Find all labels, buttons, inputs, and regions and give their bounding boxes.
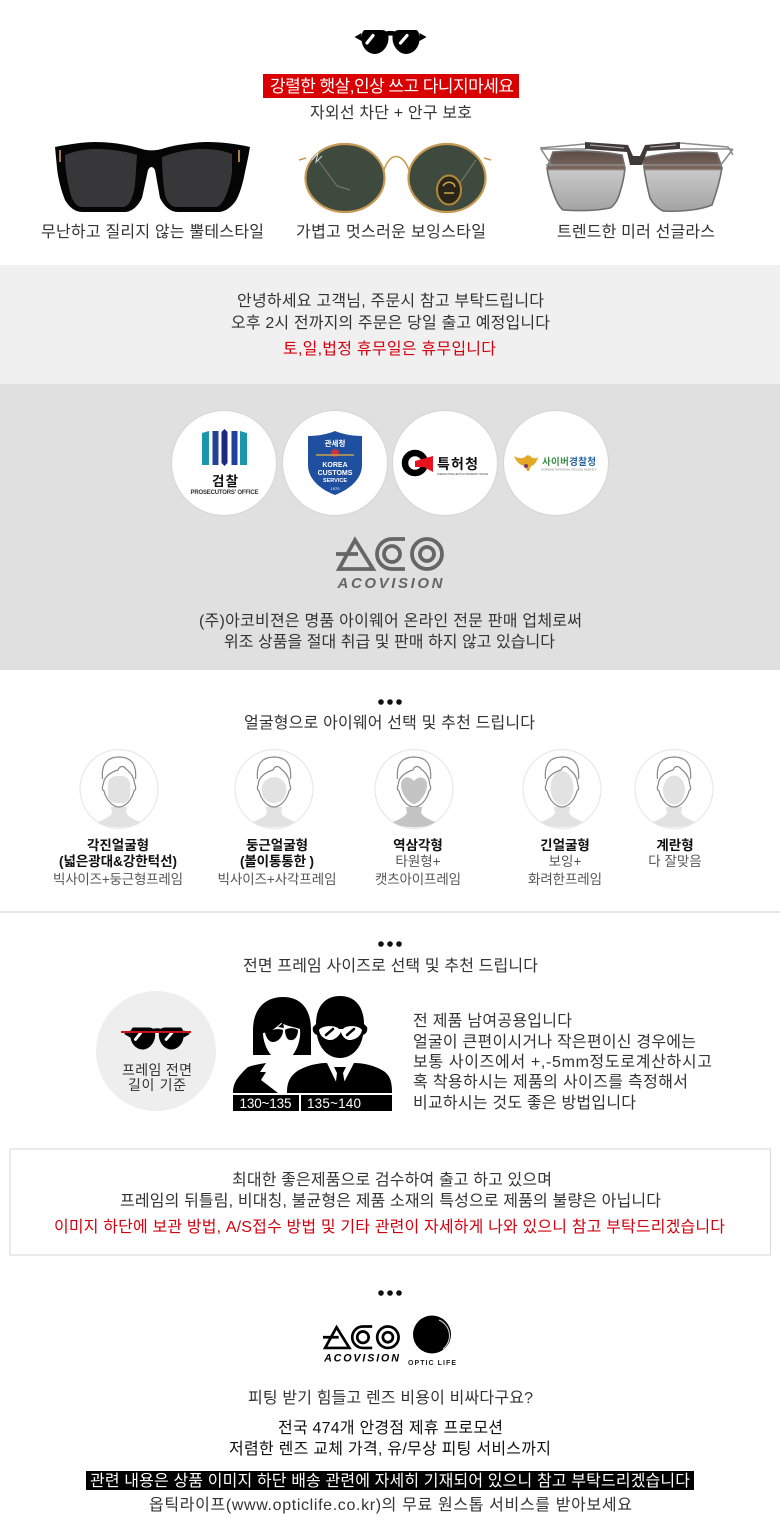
- frame width measure badge: [96, 991, 216, 1111]
- face: round: (볼이통통한 ): [240, 854, 314, 869]
- face: long: [523, 750, 602, 887]
- heading: 전면 프레임 사이즈로 선택 및 추천 드립니다: [243, 957, 538, 975]
- dots: [378, 1290, 402, 1296]
- panel: shipping notice: [0, 265, 780, 384]
- red headline: 강렬한 햇살,인상 쓰고 다니지마세요: [270, 77, 514, 96]
- face: inverted triangle: 캣츠아이프레임: [375, 872, 461, 887]
- notice text: 안녕하세요 고객님, 주문시 참고 부탁드립니다: [237, 292, 544, 310]
- face: oval: 계란형: [656, 838, 694, 853]
- shipping cutoff text: 오후 2시 전까지의 주문은 당일 출고 예정입니다: [231, 314, 550, 332]
- face: round: 둥근얼굴형: [246, 838, 308, 853]
- icon: sunglasses: [354, 30, 426, 54]
- face: long: 긴얼굴형: [540, 838, 590, 853]
- black notice bar: 관련 내용은 상품 이미지 하단 배송 관련에 자세히 기재되어 있으니 참고 부탁드리겠습니다: [90, 1472, 690, 1490]
- promotion line: 전국 474개 안경점 제휴 프로모션: [278, 1419, 503, 1437]
- lens price line: 저렴한 렌즈 교체 가격, 유/무상 피팅 서비스까지: [229, 1440, 551, 1458]
- face: square: [53, 750, 183, 887]
- dots: [378, 699, 402, 705]
- face: round: 빅사이즈+사각프레임: [218, 872, 336, 887]
- badge: patent office: 특 허 청: [437, 456, 478, 472]
- badge: cyber police: KOREAN NATIONAL POLICE AGENCY: [541, 468, 597, 472]
- face: oval: 다 잘맞음: [648, 854, 702, 869]
- quality inspection line: 최대한 좋은제품으로 검수하여 출고 하고 있으며: [232, 1171, 552, 1189]
- badge: cyber police: 사이버경찰청: [542, 456, 596, 468]
- face: square: 각진얼굴형: [87, 838, 149, 853]
- subheading: 자외선 차단 + 안구 보호: [310, 104, 472, 122]
- frame width measure badge: 길이 기준: [128, 1077, 186, 1093]
- product: black square sunglasses: [55, 142, 250, 212]
- holiday warning: 토,일,법정 휴무일은 휴무입니다: [283, 340, 496, 358]
- panel: intro: [41, 30, 733, 241]
- panel: face shape guide: [53, 699, 713, 887]
- logo: acovision black: [323, 1327, 399, 1364]
- face: square: 빅사이즈+둥근형프레임: [53, 872, 183, 887]
- panel: optic life service: [86, 1290, 694, 1514]
- badge: patent office: KOREAN INTELLECTUAL PROPERTY OFFICE: [437, 472, 488, 476]
- icon: woman and man silhouettes with size labels: [233, 996, 392, 1111]
- badge: prosecutors office: [172, 410, 276, 516]
- company statement: (주)아코비젼은 명품 아이웨어 온라인 전문 판매 업체로써: [199, 612, 582, 630]
- question line: 피팅 받기 힘들고 렌즈 비용이 비싸다구요?: [248, 1389, 533, 1407]
- face: inverted triangle: 역삼각형: [393, 838, 443, 853]
- frame width measure badge: 프레임 전면: [122, 1062, 192, 1078]
- badge: prosecutors office: PROSECUTORS' OFFICE: [190, 490, 258, 496]
- badge: cyber police: [504, 410, 608, 516]
- size advice text: 보통 사이즈에서 +,-5mm정도로계산하시고: [413, 1053, 712, 1071]
- badge: korea customs: [282, 410, 388, 516]
- logo: optic life: [408, 1316, 456, 1367]
- product: gold round sunglasses: [299, 144, 491, 212]
- badge: korea customs: 관세청: [325, 438, 345, 448]
- size advice text: 전 제품 남여공용입니다: [413, 1012, 572, 1030]
- size advice text: 비교하시는 것도 좋은 방법입니다: [413, 1094, 636, 1112]
- panel: frame size guide: [96, 941, 712, 1112]
- face: long: 화려한프레임: [528, 872, 602, 887]
- service line: 옵틱라이프(www.opticlife.co.kr)의 무료 원스톱 서비스를 받아보세요: [149, 1496, 632, 1514]
- size advice text: [413, 1012, 712, 1112]
- icon: woman and man silhouettes with size labels: 135~140: [307, 1096, 361, 1111]
- panel: quality note box: [10, 1149, 770, 1255]
- face: inverted triangle: 타원형+: [395, 854, 441, 869]
- caption: mirror style: 트렌드한 미러 선글라스: [557, 223, 715, 241]
- face: inverted triangle: [375, 750, 461, 887]
- icon: woman and man silhouettes with size labels: 130~135: [240, 1096, 292, 1111]
- face: round: [218, 750, 336, 887]
- red notice line: 이미지 하단에 보관 방법, A/S접수 방법 및 기타 관련이 자세하게 나와 있으니 참고 부탁드리겠습니다: [54, 1218, 725, 1236]
- logo: optic life: OPTIC LIFE: [408, 1360, 456, 1367]
- product characteristics line: 프레임의 뒤틀림, 비대칭, 불균형은 제품 소재의 특성으로 제품의 불량은 아닙니다: [120, 1192, 661, 1210]
- badge: korea customs: KOREA: [322, 462, 348, 469]
- badge: patent office: [392, 410, 498, 516]
- heading: 얼굴형으로 아이웨어 선택 및 추천 드립니다: [244, 714, 535, 732]
- badge: prosecutors office: 검찰: [212, 474, 239, 489]
- face: square: (넓은광대&강한턱선): [59, 854, 177, 869]
- panel: authenticity: [0, 384, 780, 670]
- badge: korea customs: CUSTOMS: [318, 470, 353, 477]
- caption: black frame style: 무난하고 질리지 않는 뿔테스타일: [41, 223, 264, 241]
- face: oval: [635, 750, 713, 869]
- badge: korea customs: 1970: [331, 486, 340, 491]
- dots: [378, 941, 402, 947]
- no counterfeit statement: 위조 상품을 절대 취급 및 판매 하지 않고 있습니다: [224, 633, 555, 651]
- caption: gold frame style: 가볍고 멋스러운 보잉스타일: [296, 223, 486, 241]
- logo: acovision: [336, 539, 444, 592]
- badge: korea customs: SERVICE: [323, 478, 347, 484]
- size advice text: 얼굴이 큰편이시거나 작은편이신 경우에는: [413, 1033, 696, 1051]
- product: mirror sunglasses: [540, 142, 733, 211]
- size advice text: 혹 착용하시는 제품의 사이즈를 측정해서: [413, 1073, 688, 1091]
- face: long: 보잉+: [549, 854, 581, 869]
